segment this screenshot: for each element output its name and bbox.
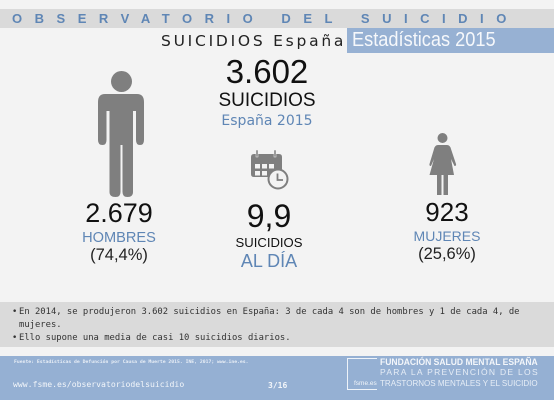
foundation tagline second line: TRASTORNOS MENTALES Y EL SUICIDIO (380, 378, 538, 388)
statistics label (347, 28, 554, 53)
icon: calendar with clock (251, 150, 288, 190)
bullet: first statement (12, 307, 520, 330)
statistics label: Estadísticas 2015 (352, 29, 496, 51)
men count: 2.679 (85, 198, 153, 228)
bullet: second statement: • (12, 333, 17, 343)
bullet: first statement: • (12, 307, 17, 317)
subtitle: SUICIDIOS España (161, 32, 346, 50)
men label: HOMBRES (82, 230, 156, 246)
daily average highlight: AL DÍA (241, 251, 297, 271)
logo: fsme.es: fsme.es (354, 380, 377, 387)
total number: 3.602 (226, 53, 308, 90)
men percentage: (74,4%) (90, 246, 148, 264)
daily average number: 9,9 (247, 198, 291, 234)
total label: SUICIDIOS (218, 90, 316, 111)
bullet: first statement: En 2014, se produjeron 3.602 suicidios en España: 3 de cada 4 son de hombres y 1 de cada 4, de (19, 307, 520, 317)
icon: man (98, 71, 144, 197)
icon: woman (429, 133, 456, 195)
bullet: first statement: mujeres. (19, 320, 62, 330)
women percentage: (25,6%) (418, 245, 476, 263)
logo: fsme.es (347, 358, 377, 390)
women count: 923 (425, 197, 469, 227)
header band (0, 9, 554, 28)
website: www.fsme.es/observatoriodelsuicidio (13, 378, 184, 388)
foundation tagline: PARA LA PREVENCIÓN DE LOS (380, 367, 539, 377)
panel: summary (0, 302, 554, 347)
bullet: second statement: Ello supone una media de casi 10 suicidios diarios. (19, 333, 291, 343)
header title: OBSERVATORIO DEL SUICIDIO (12, 11, 519, 26)
page number: 3/16 (268, 381, 287, 390)
source note: Fuente: Estadísticas de Defunción por Causa de Muerte 2015. INE, 2017; www.ine.es. (14, 360, 248, 365)
daily average label: SUICIDIOS (236, 235, 302, 250)
footer (0, 356, 554, 400)
foundation name: FUNDACIÓN SALUD MENTAL ESPAÑA (380, 357, 538, 367)
women label: MUJERES (414, 228, 480, 244)
total place and year: España 2015 (221, 113, 313, 129)
